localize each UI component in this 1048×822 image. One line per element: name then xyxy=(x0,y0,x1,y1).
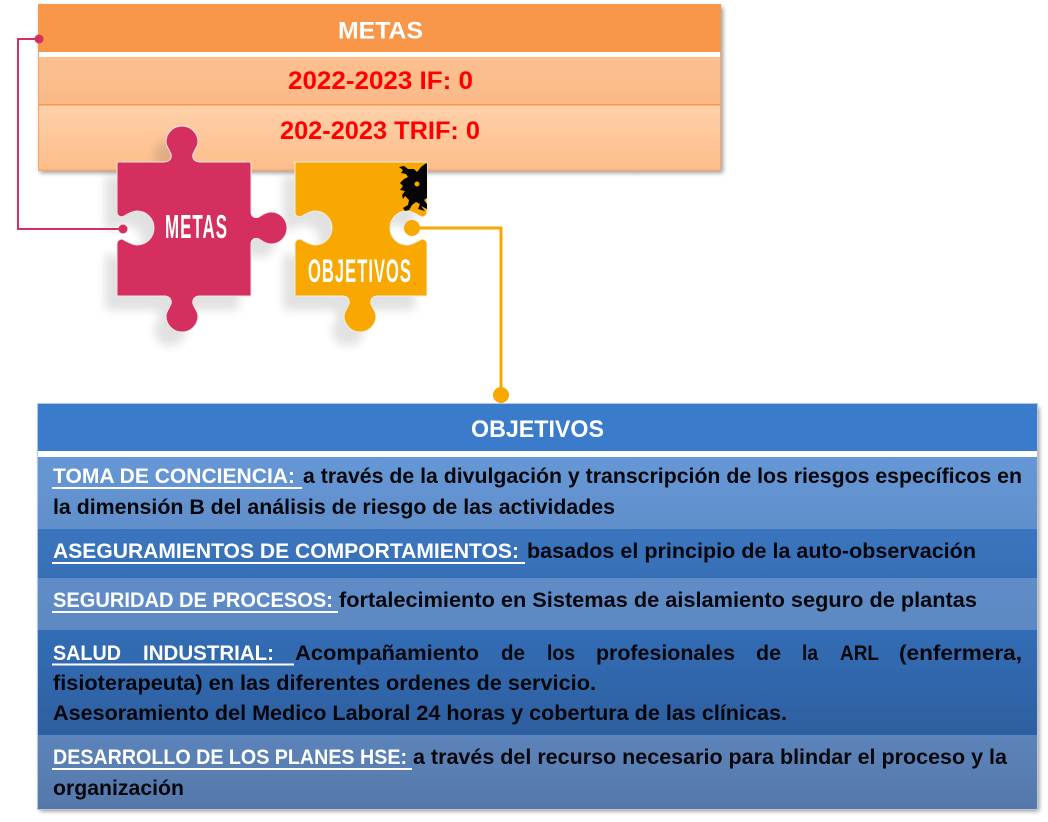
connector: metas line xyxy=(18,34,123,229)
puzzle piece: metas xyxy=(117,126,287,332)
objetivos header: OBJETIVOS xyxy=(471,416,604,443)
metas row: TRIF: 202-2023 TRIF: 0 xyxy=(280,117,480,145)
metas header: METAS xyxy=(338,18,423,44)
row: salud industrial: fisioterapeuta) en las diferentes ordenes de servicio. xyxy=(53,672,596,695)
row: salud industrial: SALUD xyxy=(53,642,121,665)
row: toma de conciencia: a través de la divulgación y transcripción de los riesgos específicos en xyxy=(303,465,1022,488)
row: salud industrial xyxy=(38,630,1037,735)
row: salud industrial: la xyxy=(802,642,818,665)
row: desarrollo de los planes hse xyxy=(38,735,1037,809)
row: desarrollo de los planes hse: a través del recurso necesario para blindar el proceso y la xyxy=(413,746,1007,769)
metas header xyxy=(38,4,721,52)
puzzle piece: objetivos xyxy=(295,162,427,332)
row: toma de conciencia xyxy=(38,457,1037,529)
panel: objetivos xyxy=(38,404,1039,811)
metas row: IF: 2022-2023 IF: 0 xyxy=(288,67,473,95)
row: aseguramientos de comportamientos: ASEGURAMIENTOS DE COMPORTAMIENTOS: xyxy=(53,540,519,563)
row: salud industrial: INDUSTRIAL: xyxy=(143,642,274,665)
puzzle piece: metas: METAS xyxy=(165,208,228,245)
row: salud industrial: ARL xyxy=(840,642,879,665)
metas row: IF xyxy=(39,57,720,104)
puzzle shadows xyxy=(105,140,415,346)
row: toma de conciencia: la dimensión B del análisis de riesgo de las actividades xyxy=(53,496,615,519)
row: salud industrial: de xyxy=(756,642,781,665)
row: salud industrial: de xyxy=(501,642,525,665)
row: salud industrial: profesionales xyxy=(596,642,735,665)
row: seguridad de procesos xyxy=(38,578,1037,630)
row: desarrollo de los planes hse: organización xyxy=(53,777,184,800)
icon: dragon crest xyxy=(399,163,427,211)
connector: objetivos line xyxy=(404,220,509,403)
row: salud industrial: los xyxy=(547,642,575,665)
row: seguridad de procesos: fortalecimiento en Sistemas de aislamiento seguro de plantas xyxy=(339,589,977,612)
row: desarrollo de los planes hse: DESARROLLO DE LOS PLANES HSE: xyxy=(53,746,407,769)
row: aseguramientos de comportamientos: basados el principio de la auto-observación xyxy=(527,540,976,563)
row: aseguramientos de comportamientos xyxy=(38,529,1037,578)
row: seguridad de procesos: SEGURIDAD DE PROCESOS: xyxy=(53,589,333,612)
row: salud industrial: Asesoramiento del Medico Laboral 24 horas y cobertura de las clínicas. xyxy=(53,702,787,725)
row: toma de conciencia: TOMA DE CONCIENCIA: xyxy=(53,465,295,488)
row: salud industrial: Acompañamiento xyxy=(295,642,479,665)
row: salud industrial: (enfermera, xyxy=(899,642,1022,665)
objetivos header xyxy=(38,404,1037,451)
panel: metas xyxy=(38,4,723,173)
metas row: TRIF xyxy=(39,106,720,170)
puzzle piece: objetivos: OBJETIVOS xyxy=(308,253,412,289)
